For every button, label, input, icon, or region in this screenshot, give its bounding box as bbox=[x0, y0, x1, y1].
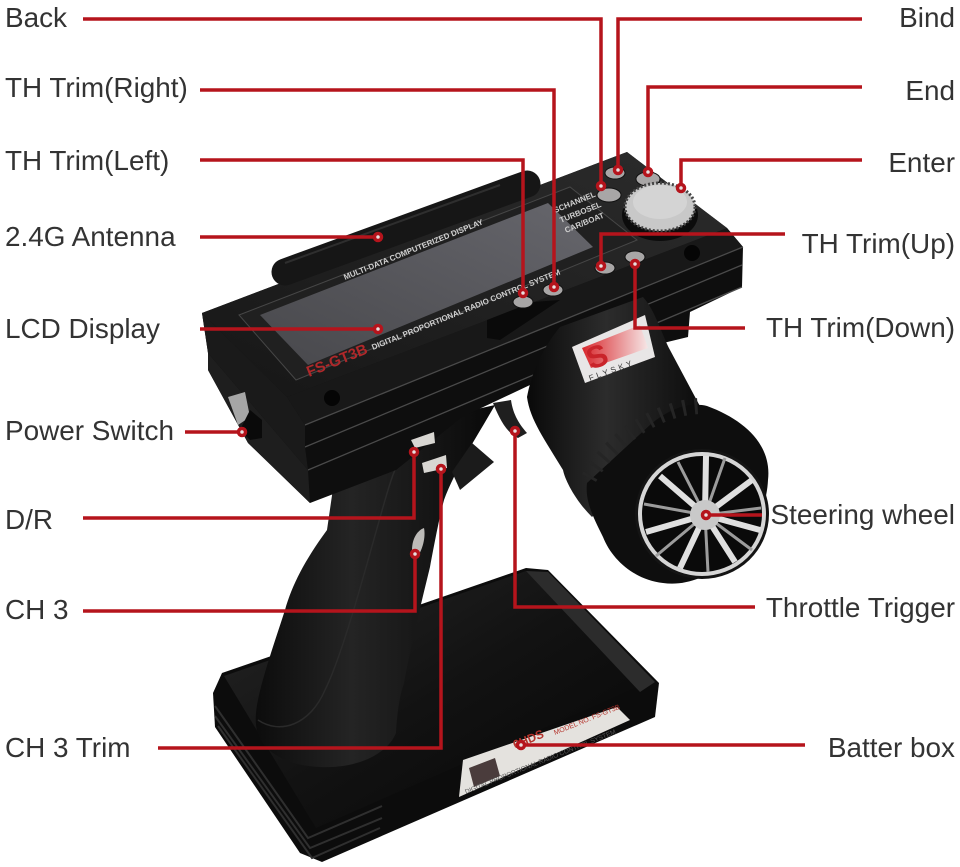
CH 3 trim switch bbox=[422, 455, 447, 473]
callout: CH 3 bbox=[5, 550, 418, 625]
throttle trigger bbox=[493, 400, 527, 438]
printed text: FS-GT3B bbox=[304, 341, 370, 381]
callout: Bind: Bind bbox=[899, 2, 955, 33]
callout: Throttle Trigger bbox=[512, 428, 955, 623]
printed text bbox=[304, 190, 605, 381]
battery label plate bbox=[459, 704, 630, 797]
battery label plate: DIGITAL PROPORTIONAL RADIO CONTROL SYSTEM bbox=[464, 729, 617, 796]
LCD screen bbox=[260, 203, 593, 365]
battery box base bbox=[213, 568, 659, 862]
D/R switch bbox=[411, 432, 435, 448]
printed text: SCHANNEL bbox=[552, 190, 597, 215]
tire bbox=[587, 405, 768, 584]
callout: D/R: D/R bbox=[5, 504, 53, 535]
callout: Enter: Enter bbox=[888, 147, 955, 178]
callout: TH Trim(Up): TH Trim(Up) bbox=[802, 228, 955, 259]
callout: CH 3 Trim bbox=[5, 466, 444, 763]
battery label plate: MODEL NO. FS-GT3B bbox=[553, 704, 621, 737]
callout: CH 3: CH 3 bbox=[5, 594, 69, 625]
callout: End: End bbox=[905, 75, 955, 106]
FlySky badge: FLYSKY bbox=[588, 358, 636, 383]
callout: Enter bbox=[678, 147, 955, 192]
callout: Throttle Trigger: Throttle Trigger bbox=[766, 592, 955, 623]
callout: D/R bbox=[5, 448, 418, 535]
battery label plate: 6HDS bbox=[511, 727, 546, 752]
printed text: TURBOSEL bbox=[558, 200, 603, 225]
callout: CH 3 Trim: CH 3 Trim bbox=[5, 732, 131, 763]
callout: LCD Display bbox=[5, 313, 382, 344]
callout: Back bbox=[5, 2, 604, 190]
transmitter body bbox=[202, 152, 743, 503]
FlySky badge: S bbox=[581, 337, 613, 377]
printed text: DIGITAL PROPORTIONAL RADIO CONTROL SYSTEM bbox=[370, 268, 562, 352]
callout: TH Trim(Right) bbox=[5, 72, 558, 290]
CH 3 knob bbox=[412, 528, 425, 556]
screw holes bbox=[324, 390, 340, 406]
callout: Back: Back bbox=[5, 2, 67, 33]
2.4G antenna bbox=[285, 184, 527, 272]
callout: Bind bbox=[614, 2, 955, 174]
callout: Batter box: Batter box bbox=[828, 732, 955, 763]
buttons bbox=[513, 167, 660, 308]
callout: TH Trim(Right): TH Trim(Right) bbox=[5, 72, 188, 103]
callout: 2.4G Antenna bbox=[5, 221, 382, 252]
callout: TH Trim(Down) bbox=[632, 260, 955, 343]
callout: Batter box bbox=[518, 732, 955, 763]
printed text: CAR/BOAT bbox=[563, 211, 605, 235]
rotary knob bbox=[622, 183, 698, 241]
printed text: MULTI-DATA COMPUTERIZED DISPLAY bbox=[342, 217, 485, 282]
trim panel block bbox=[487, 300, 560, 340]
callout: TH Trim(Down): TH Trim(Down) bbox=[766, 312, 955, 343]
callout: TH Trim(Left) bbox=[5, 145, 526, 296]
chrome rim bbox=[640, 454, 764, 574]
pistol grip bbox=[256, 405, 495, 767]
FlySky badge bbox=[572, 315, 655, 383]
power switch bbox=[228, 392, 250, 425]
callout: TH Trim(Left): TH Trim(Left) bbox=[5, 145, 169, 176]
callout: 2.4G Antenna: 2.4G Antenna bbox=[5, 221, 176, 252]
callout: Steering wheel: Steering wheel bbox=[770, 499, 955, 530]
steering column and wheel bbox=[527, 297, 769, 584]
LCD bezel bbox=[239, 187, 637, 380]
callout: Power Switch: Power Switch bbox=[5, 415, 174, 446]
callout: TH Trim(Up) bbox=[598, 228, 955, 270]
grip flange bbox=[452, 443, 494, 490]
callout: LCD Display: LCD Display bbox=[5, 313, 160, 344]
callout: End bbox=[644, 75, 955, 176]
